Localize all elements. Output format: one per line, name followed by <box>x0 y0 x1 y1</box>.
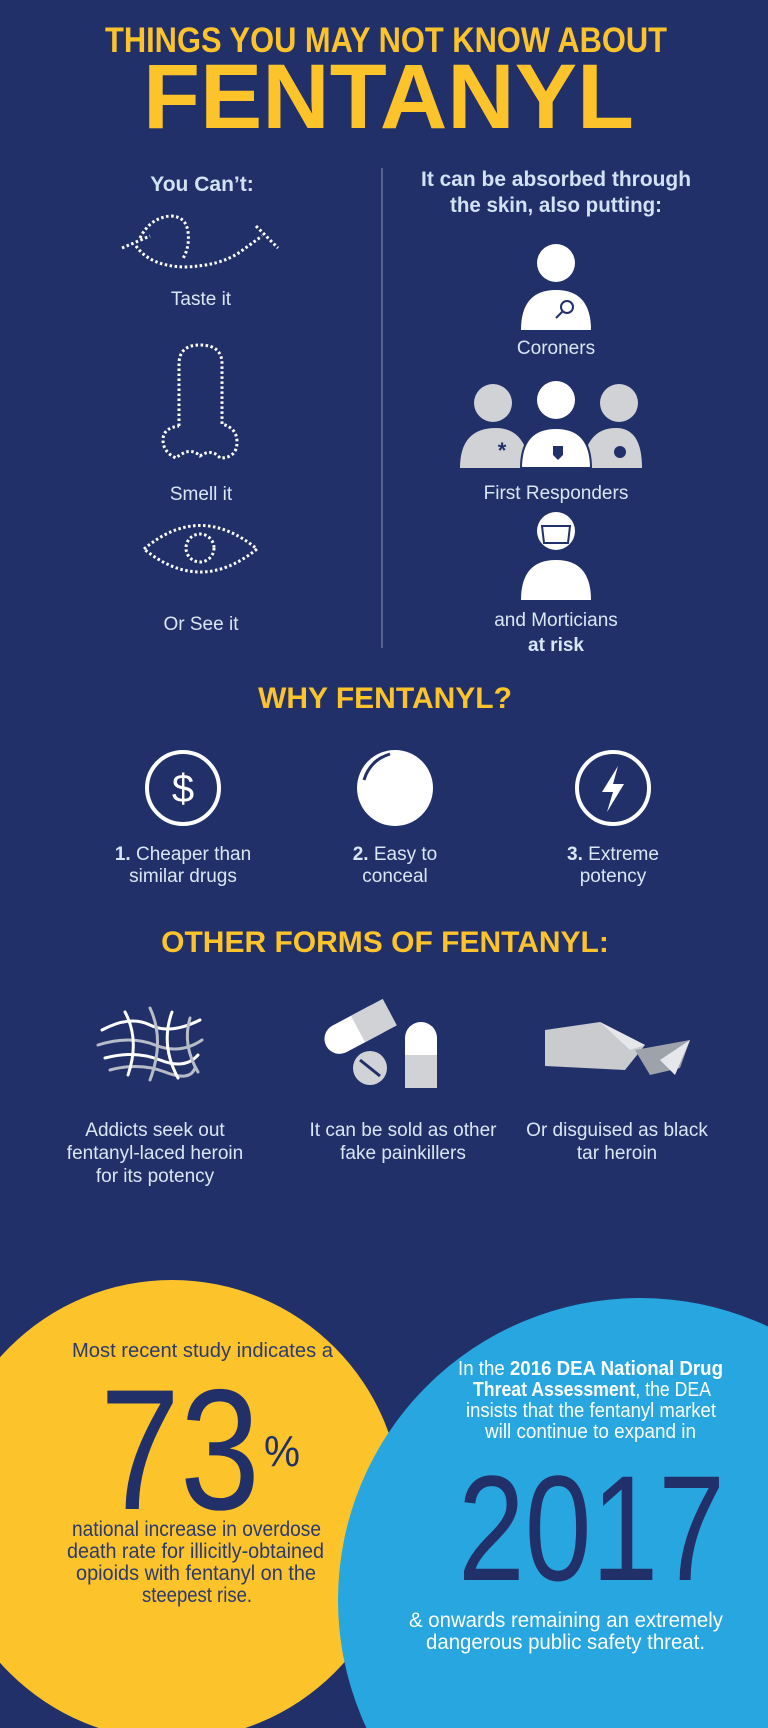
icon: first responders <box>460 381 642 468</box>
icon: dollar <box>147 752 219 824</box>
panel: blue 2017 circle: In the 2016 DEA National Drug <box>458 1358 723 1380</box>
icon: black tar rock <box>545 1022 690 1075</box>
reasons captions: conceal <box>362 866 428 887</box>
reasons captions: similar drugs <box>129 866 237 887</box>
title: THINGS YOU MAY NOT KNOW ABOUT <box>105 21 667 60</box>
panel: blue 2017 circle: & onwards remaining an extremely <box>409 1609 723 1632</box>
label: smell it: Smell it <box>170 484 233 505</box>
label: morticians at risk <box>494 610 618 656</box>
icon: eye <box>144 526 257 572</box>
heading: you can't: You Can’t: <box>150 173 254 196</box>
forms captions <box>67 1120 708 1187</box>
icon: conceal ball <box>357 750 433 826</box>
heading: absorbed through skin: the skin, also putting: <box>450 194 662 217</box>
forms captions: for its potency <box>96 1166 215 1187</box>
reasons captions: 2. Easy to <box>353 844 437 865</box>
icon: pills <box>319 999 437 1088</box>
forms captions: fake painkillers <box>340 1143 466 1164</box>
forms captions: tar heroin <box>577 1143 657 1164</box>
forms captions: Or disguised as black <box>526 1120 708 1141</box>
panel: yellow 73% circle <box>0 1280 402 1728</box>
forms captions: Addicts seek out <box>85 1120 225 1141</box>
title: FENTANYL <box>143 46 634 148</box>
panel: blue 2017 circle: will continue to expand in <box>484 1421 696 1443</box>
panel: blue 2017 circle <box>338 1298 768 1728</box>
heading: absorbed through skin <box>421 168 691 217</box>
label: or see it: Or See it <box>164 614 239 635</box>
panel: yellow 73% circle: steepest rise. <box>142 1584 252 1607</box>
panel: blue 2017 circle: insists that the fentanyl market <box>466 1400 716 1422</box>
panel: yellow 73% circle: national increase in overdose <box>72 1518 321 1541</box>
icon: lightning <box>577 752 649 824</box>
heading: other forms: OTHER FORMS OF FENTANYL: <box>161 926 609 959</box>
reasons captions: 1. Cheaper than <box>115 844 251 865</box>
panel: yellow 73% circle: death rate for illicitly-obtained <box>67 1540 324 1563</box>
label: first responders: First Responders <box>484 483 628 504</box>
reasons captions: potency <box>580 866 647 887</box>
label: taste it: Taste it <box>171 289 232 310</box>
forms captions: It can be sold as other <box>310 1120 497 1141</box>
icon: nose <box>163 345 237 458</box>
icon: first responders: * <box>498 438 507 463</box>
panel: yellow 73% circle: opioids with fentanyl on the <box>76 1562 316 1585</box>
icon: mortician <box>521 512 591 600</box>
heading: absorbed through skin: It can be absorbed through <box>421 168 691 191</box>
label: morticians at risk: at risk <box>528 635 584 656</box>
reasons captions: 3. Extreme <box>567 844 659 865</box>
icon: tongue <box>122 216 278 267</box>
panel: blue 2017 circle: Threat Assessment, the DEA <box>473 1379 712 1401</box>
label: coroners: Coroners <box>517 338 595 359</box>
panel: yellow 73% circle: 73 <box>100 1354 260 1546</box>
heading: why fentanyl: WHY FENTANYL? <box>258 682 512 715</box>
reasons captions <box>115 844 659 887</box>
panel: yellow 73% circle: Most recent study indicates a <box>72 1340 334 1362</box>
panel: blue 2017 circle: dangerous public safety threat. <box>426 1631 705 1654</box>
icon: heroin strands <box>98 1008 202 1080</box>
panel: yellow 73% circle: % <box>264 1427 300 1476</box>
forms captions: fentanyl-laced heroin <box>67 1143 243 1164</box>
icon: dollar: $ <box>172 767 194 811</box>
icon: coroner <box>521 244 591 330</box>
title <box>105 21 667 148</box>
label: morticians at risk: and Morticians <box>494 610 618 631</box>
